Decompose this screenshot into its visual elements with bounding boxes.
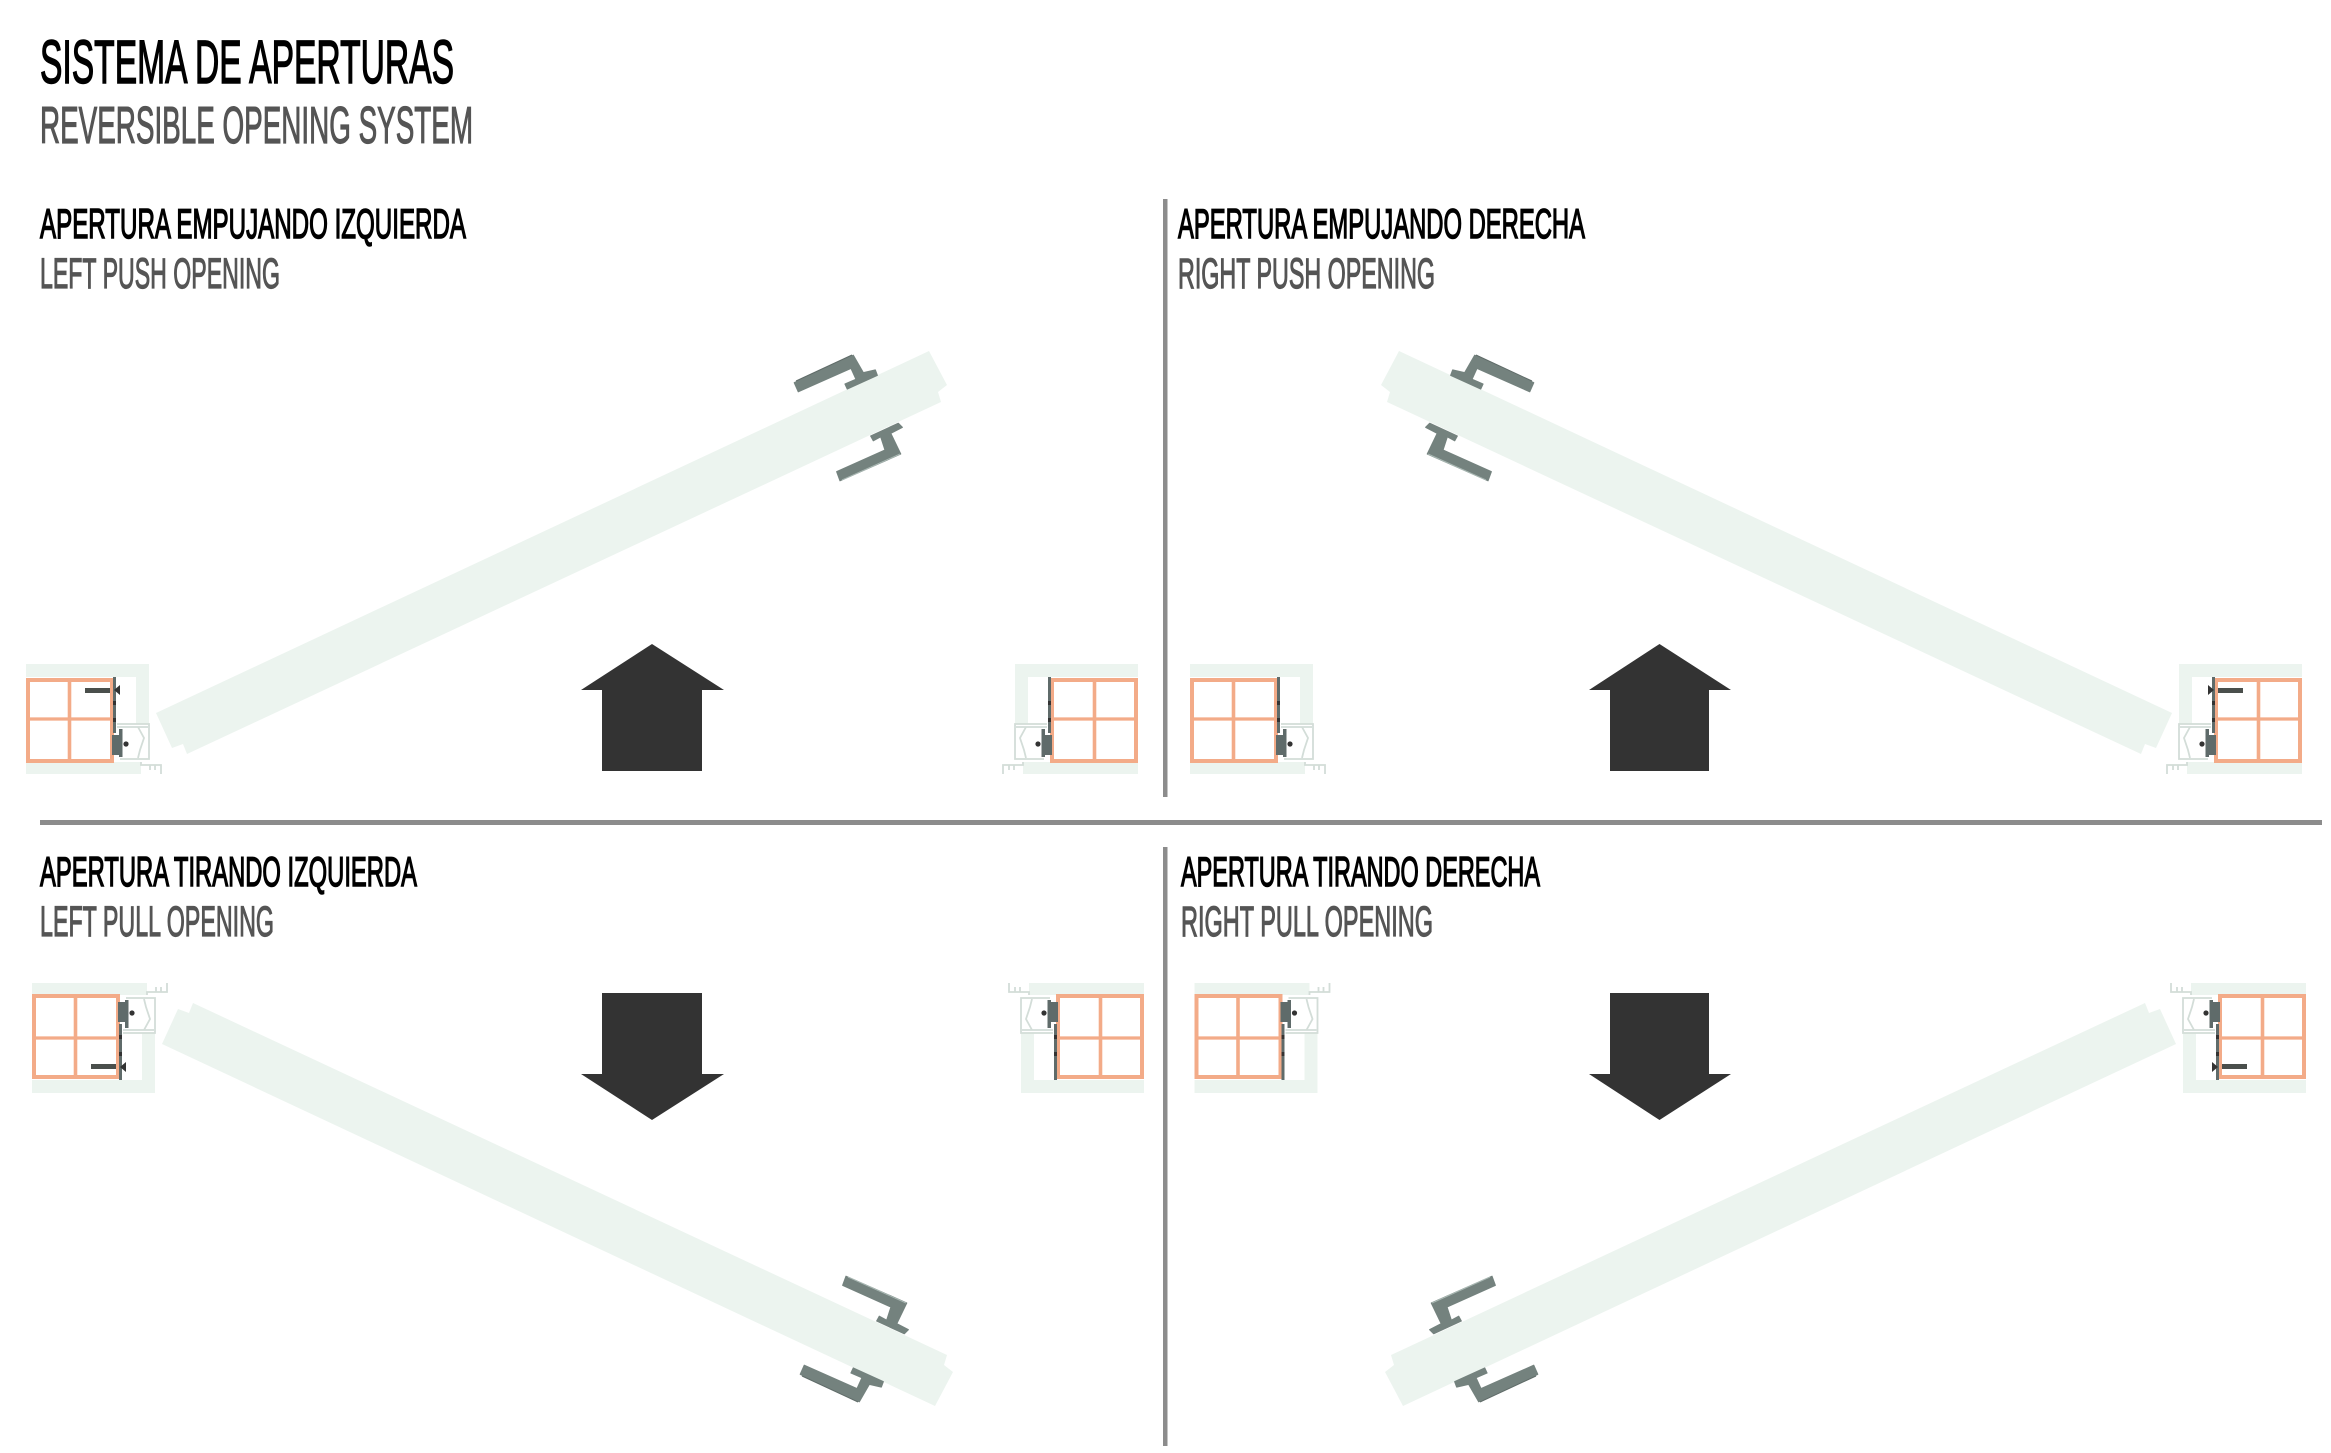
- heading: right push: APERTURA EMPUJANDO DERECHA: [1178, 200, 1585, 247]
- arrow up: [581, 644, 724, 771]
- panel: left push opening: [26, 200, 1138, 774]
- left frame section: [26, 664, 161, 774]
- heading: right push: [1178, 200, 1585, 298]
- panel: left pull opening: [32, 848, 1144, 1406]
- heading: right pull: [1181, 848, 1540, 946]
- left frame section: [32, 983, 167, 1093]
- door with handles: [1385, 1003, 2176, 1406]
- heading: left push: APERTURA EMPUJANDO IZQUIERDA: [40, 200, 466, 247]
- heading: left push: LEFT PUSH OPENING: [40, 250, 280, 298]
- left frame section: [1190, 664, 1325, 774]
- right frame section: [1009, 983, 1144, 1093]
- heading: right pull: RIGHT PULL OPENING: [1181, 898, 1433, 946]
- right frame section: [2167, 664, 2302, 774]
- right frame section: [2171, 983, 2306, 1093]
- heading: right push: RIGHT PUSH OPENING: [1178, 250, 1435, 298]
- arrow down: [1589, 993, 1731, 1120]
- heading: right pull: APERTURA TIRANDO DERECHA: [1181, 848, 1540, 895]
- heading: left push: [40, 200, 466, 298]
- heading: left pull: LEFT PULL OPENING: [40, 898, 274, 946]
- right frame section: [1003, 664, 1138, 774]
- title: REVERSIBLE OPENING SYSTEM: [40, 97, 473, 155]
- title: SISTEMA DE APERTURAS: [40, 28, 454, 96]
- panel: right push opening: [1178, 200, 2302, 774]
- title: [40, 28, 473, 155]
- heading: left pull: [40, 848, 417, 946]
- left frame section: [1194, 983, 1330, 1093]
- arrow up: [1589, 644, 1731, 771]
- heading: left pull: APERTURA TIRANDO IZQUIERDA: [40, 848, 417, 895]
- door with handles: [1381, 351, 2172, 754]
- door with handles: [156, 351, 947, 754]
- door with handles: [162, 1003, 953, 1406]
- panel: right pull opening: [1181, 848, 2306, 1406]
- arrow down: [581, 993, 724, 1120]
